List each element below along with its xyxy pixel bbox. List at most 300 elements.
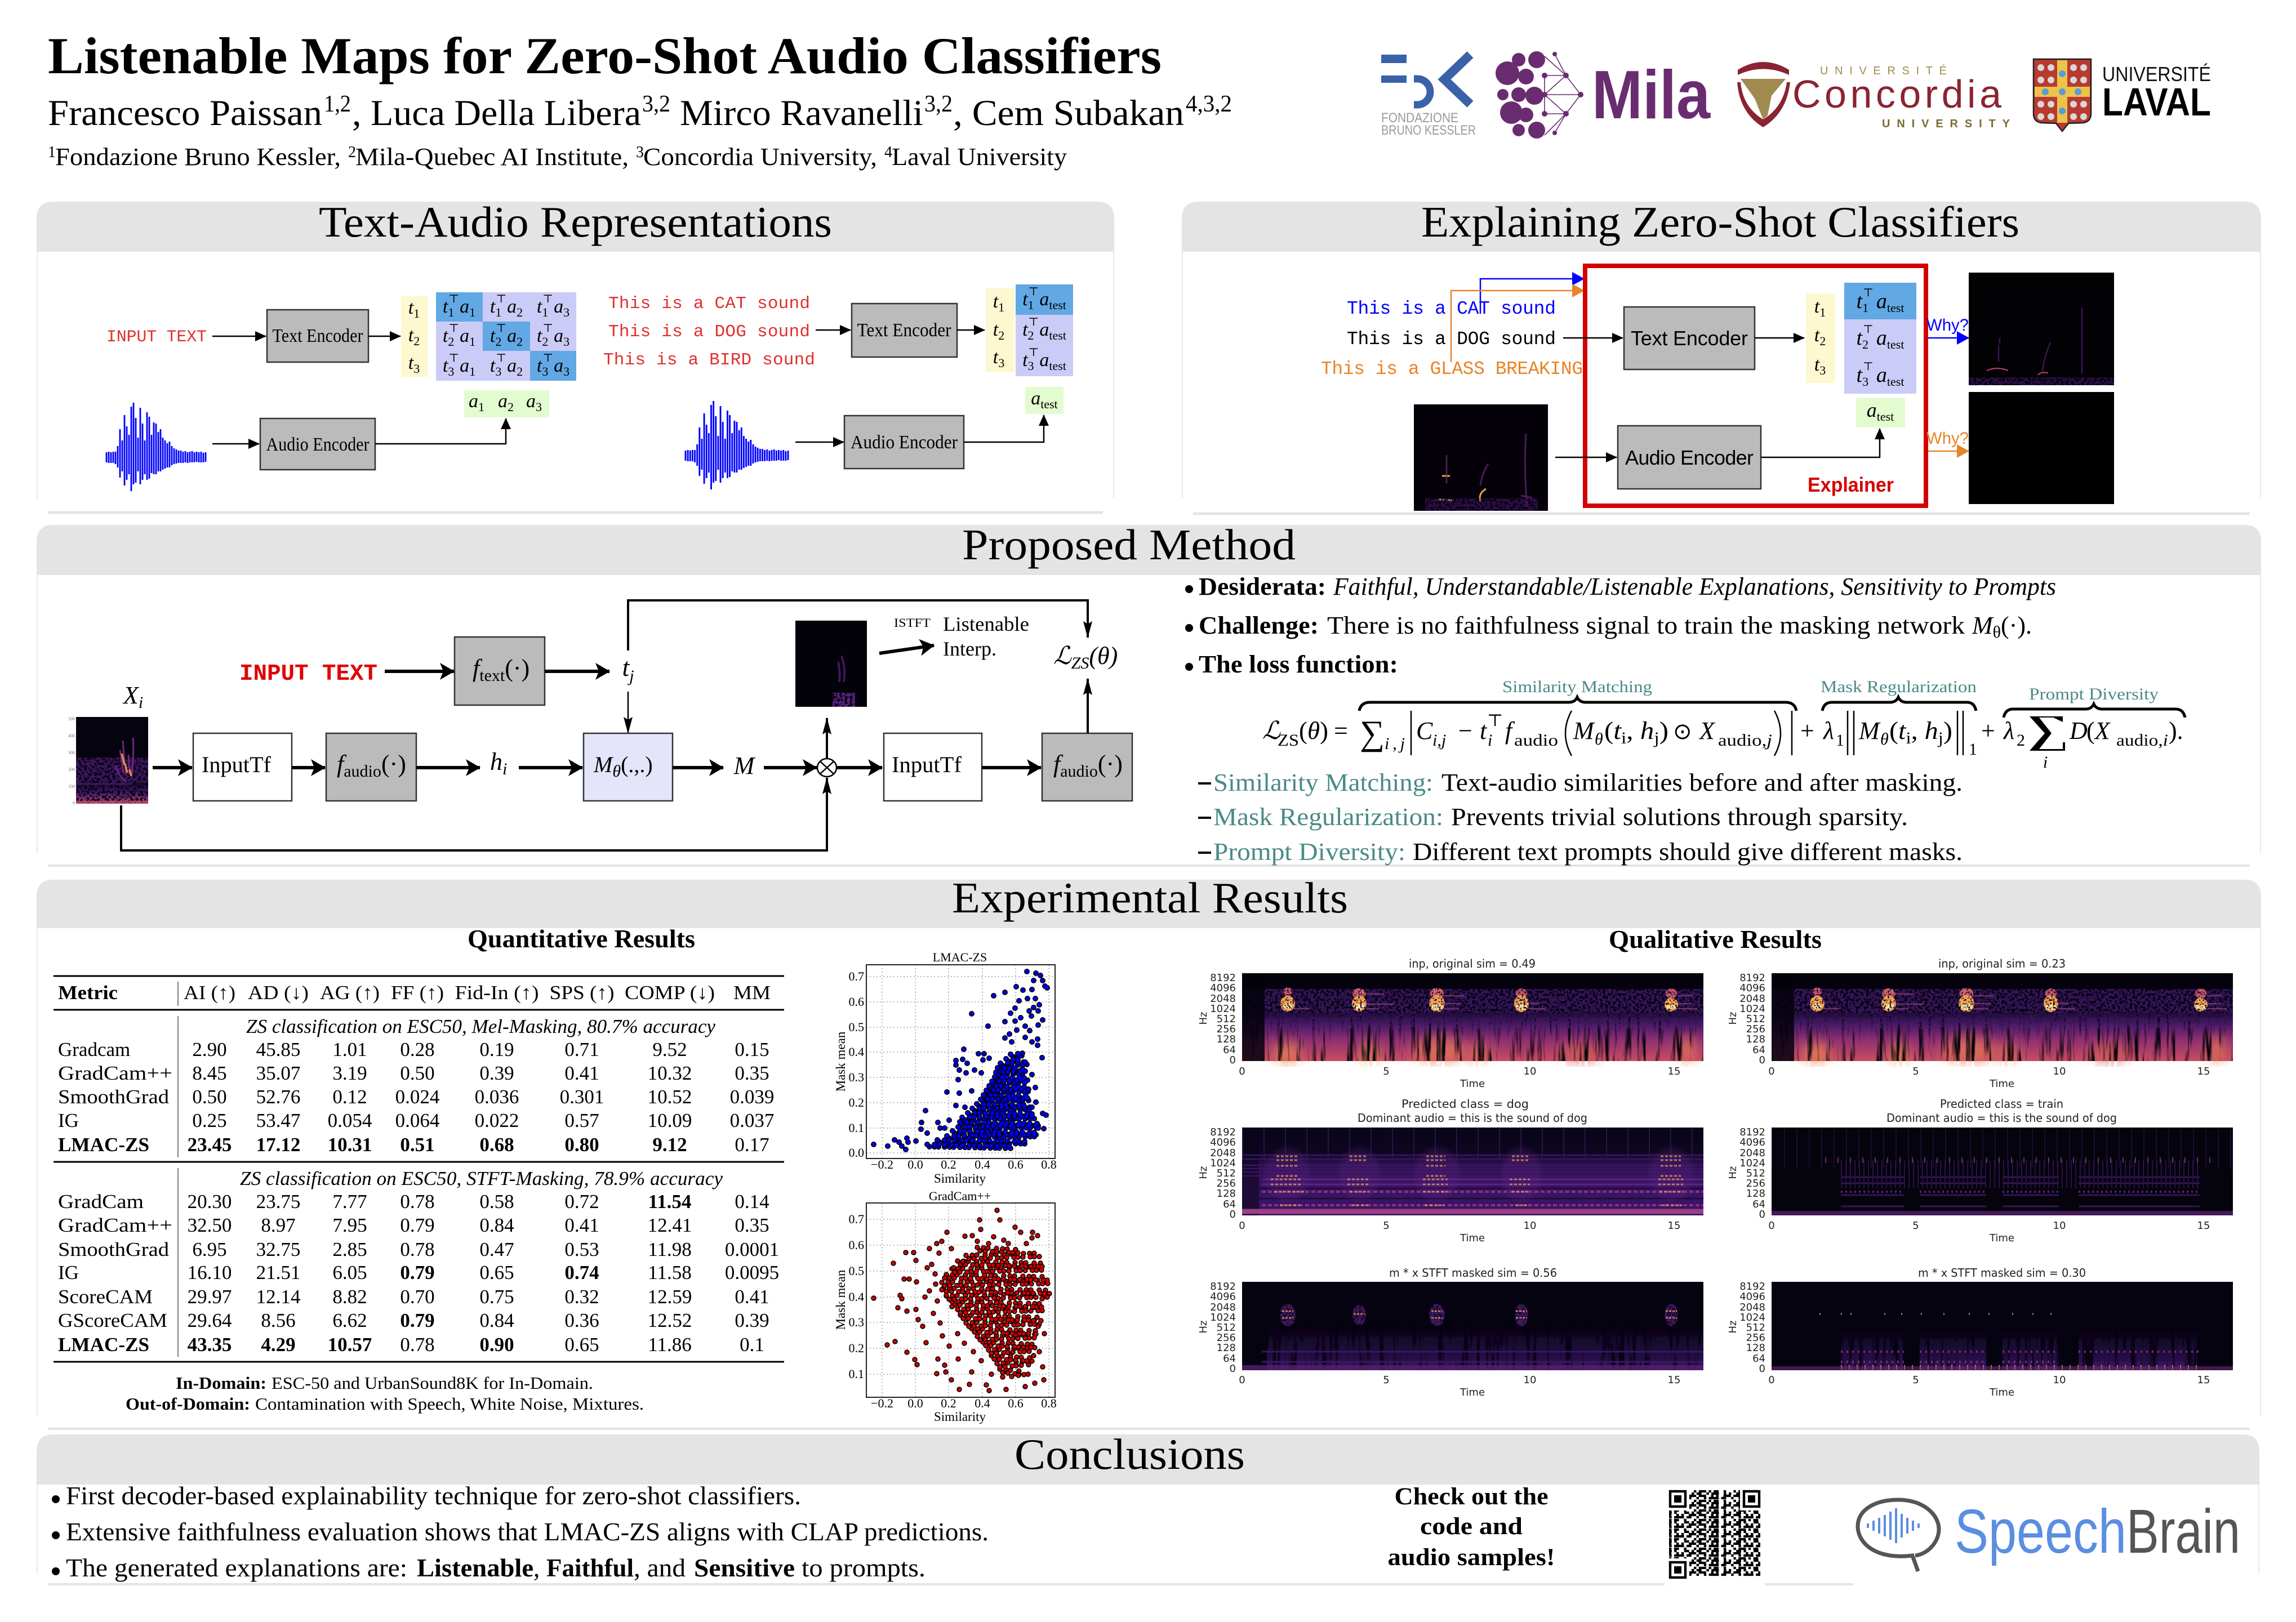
scatter plot: GradCam++: 0.7 bbox=[848, 1212, 864, 1226]
heading: Experimental Results bbox=[952, 874, 1348, 922]
conclusion bullets bbox=[52, 1482, 989, 1582]
panel: Explaining Zero-Shot Classifiers bbox=[1182, 198, 2261, 514]
left diagram: pairwise text-audio similarity: 3 bbox=[563, 364, 569, 378]
scatter plot: LMAC-ZS: −0.2 bbox=[871, 1157, 893, 1171]
table section: mel-masking: 0.51 bbox=[400, 1134, 435, 1156]
table section: mel-masking: 45.85 bbox=[256, 1039, 300, 1060]
left diagram: pairwise text-audio similarity: ⊤ bbox=[448, 293, 459, 305]
left diagram: pairwise text-audio similarity: a bbox=[460, 296, 469, 317]
spectrogram: masked sim 0.30: 2048 bbox=[1739, 1302, 1765, 1313]
table section: stft-masking: ScoreCAM bbox=[58, 1286, 153, 1308]
table section: stft-masking: LMAC-ZS bbox=[58, 1334, 149, 1356]
term explanations: Different text prompts should give different masks. bbox=[1413, 838, 1963, 866]
right diagram: zero-shot prompts: This is a BIRD sound bbox=[603, 350, 815, 370]
left diagram: pairwise text-audio similarity: 2 bbox=[508, 400, 514, 414]
table section: stft-masking: 0.14 bbox=[735, 1191, 769, 1213]
table section: stft-masking: 0.79 bbox=[400, 1309, 435, 1331]
loss function formula: D bbox=[2069, 717, 2088, 745]
encoders and similarities: test bbox=[1887, 375, 1904, 389]
method diagram: f bbox=[1053, 750, 1060, 778]
right diagram: zero-shot prompts: ⊤ bbox=[1029, 316, 1039, 328]
scatter plot: GradCam++: 0.6 bbox=[848, 1238, 864, 1252]
left diagram: pairwise text-audio similarity: 1 bbox=[448, 305, 454, 319]
loss function formula: Mask Regularization bbox=[1821, 678, 1977, 696]
method diagram: X bbox=[123, 681, 139, 709]
encoders and similarities: ⊤ bbox=[1863, 360, 1874, 373]
right diagram: zero-shot prompts: ⊤ bbox=[1029, 286, 1039, 298]
encoders and similarities: a bbox=[1876, 326, 1887, 350]
spectrogram: masked sim 0.56: 64 bbox=[1223, 1353, 1236, 1365]
table section: stft-masking: IG bbox=[58, 1262, 79, 1284]
loss function formula: = bbox=[1334, 717, 1348, 745]
heading: Proposed Method bbox=[962, 520, 1296, 569]
scatter plot: GradCam++: 0.0 bbox=[907, 1396, 923, 1410]
loss function formula: (t bbox=[1604, 717, 1621, 745]
left diagram: pairwise text-audio similarity: 2 bbox=[413, 334, 420, 348]
method diagram: i bbox=[502, 760, 507, 778]
spectrogram: predicted class train: 256 bbox=[1746, 1178, 1765, 1189]
right diagram: zero-shot prompts: test bbox=[1049, 298, 1066, 312]
table section: stft-masking: 0.78 bbox=[400, 1191, 435, 1213]
spectrogram: input, original sim 0.23: 8192 bbox=[1739, 972, 1765, 984]
right diagram: zero-shot prompts: t bbox=[1022, 350, 1028, 371]
left diagram: pairwise text-audio similarity: t bbox=[490, 296, 495, 317]
table section: mel-masking: 9.52 bbox=[652, 1039, 687, 1060]
spectrogram: predicted class dog: 128 bbox=[1217, 1188, 1236, 1200]
left diagram: pairwise text-audio similarity: t bbox=[443, 296, 448, 317]
table section: stft-masking: 21.51 bbox=[256, 1262, 300, 1284]
left diagram: pairwise text-audio similarity: 1 bbox=[413, 306, 420, 320]
left diagram: pairwise text-audio similarity: a bbox=[554, 326, 563, 346]
scatter plot: GradCam++: GradCam++ bbox=[929, 1189, 991, 1203]
affiliations bbox=[48, 143, 1067, 171]
scatter plot: LMAC-ZS bbox=[834, 950, 1057, 1186]
table section: stft-masking: 6.62 bbox=[332, 1309, 367, 1331]
authors: Mirco Ravanelli bbox=[680, 93, 923, 133]
table section: stft-masking: 32.50 bbox=[188, 1214, 232, 1236]
table section: stft-masking: GradCam++ bbox=[58, 1214, 172, 1236]
spectrogram: predicted class train: 15 bbox=[2197, 1220, 2210, 1232]
scatter plot: LMAC-ZS: 0.6 bbox=[1008, 1157, 1024, 1171]
table section: stft-masking: 0.47 bbox=[479, 1238, 514, 1260]
table section: stft-masking: 2.85 bbox=[332, 1238, 367, 1260]
QR code bbox=[1665, 1487, 1765, 1588]
table section: stft-masking: 0.84 bbox=[479, 1214, 514, 1236]
input mel spectrogram: 500 bbox=[68, 716, 75, 721]
encoders and similarities: ⊤ bbox=[1863, 287, 1874, 299]
table section: stft-masking: GradCam bbox=[58, 1191, 144, 1213]
masked spectrogram bbox=[795, 621, 867, 707]
spectrogram: masked sim 0.30: 1024 bbox=[1739, 1312, 1765, 1324]
explainer label: Explainer bbox=[1808, 473, 1894, 496]
conclusion bullets: First decoder-based explainability technique for zero-shot classifiers. bbox=[66, 1482, 801, 1510]
encoders and similarities: ⊤ bbox=[1863, 323, 1874, 336]
table section: mel-masking: 53.47 bbox=[256, 1109, 300, 1131]
logo: Mila bbox=[1496, 51, 1711, 139]
affiliations: Concordia University, bbox=[643, 143, 877, 171]
term explanations: Text-audio similarities before and after masking. bbox=[1441, 769, 1963, 796]
left diagram: pairwise text-audio similarity: Audio Encoder bbox=[266, 434, 370, 455]
loss function formula: i bbox=[2043, 753, 2048, 772]
left diagram: pairwise text-audio similarity: 2 bbox=[542, 335, 548, 349]
spectrogram: masked sim 0.30: 128 bbox=[1746, 1342, 1765, 1354]
spectrogram: input, original sim 0.23: 15 bbox=[2197, 1066, 2210, 1077]
table section: mel-masking bbox=[58, 1015, 774, 1156]
table section: stft-masking: 11.54 bbox=[648, 1191, 691, 1213]
panel: Text-Audio Representations bbox=[37, 198, 1114, 513]
table section: mel-masking: 0.054 bbox=[328, 1109, 372, 1131]
spectrogram: masked sim 0.30: Time bbox=[1989, 1387, 2014, 1398]
scatter plot: LMAC-ZS: 0.8 bbox=[1041, 1157, 1057, 1171]
left diagram: pairwise text-audio similarity: ⊤ bbox=[496, 293, 506, 305]
spectrogram: input, original sim 0.49: 2048 bbox=[1210, 993, 1236, 1005]
scatter plot: GradCam++: 0.3 bbox=[848, 1315, 864, 1329]
scatter plot: LMAC-ZS: 0.1 bbox=[848, 1121, 864, 1135]
left diagram: pairwise text-audio similarity: 1 bbox=[469, 335, 475, 349]
table section: stft-masking: ZS classification on ESC50, STFT-Masking, 78.9% accuracy bbox=[240, 1168, 723, 1189]
table section: stft-masking: 0.78 bbox=[400, 1334, 435, 1356]
spectrogram: predicted class dog: Hz bbox=[1198, 1166, 1209, 1179]
left diagram: pairwise text-audio similarity: 2 bbox=[517, 335, 523, 349]
loss function formula: ⊤ bbox=[1487, 711, 1503, 730]
scatter plot: GradCam++: 0.2 bbox=[941, 1396, 956, 1410]
affiliations: Laval University bbox=[892, 143, 1067, 171]
spectrogram: masked sim 0.30: 256 bbox=[1746, 1332, 1765, 1344]
left diagram: pairwise text-audio similarity: a bbox=[554, 355, 563, 376]
right diagram: zero-shot prompts: 3 bbox=[998, 356, 1004, 370]
method diagram: Interp. bbox=[943, 638, 996, 660]
table section: stft-masking: 29.97 bbox=[188, 1286, 232, 1308]
table section: mel-masking: 17.12 bbox=[256, 1134, 300, 1156]
left diagram: pairwise text-audio similarity: ⊤ bbox=[542, 352, 553, 364]
spectrogram: input, original sim 0.23: 0 bbox=[1768, 1066, 1775, 1077]
left diagram: pairwise text-audio similarity: Text Encoder bbox=[273, 326, 363, 346]
encoders and similarities: 1 bbox=[1862, 301, 1868, 315]
left diagram: pairwise text-audio similarity: t bbox=[408, 325, 413, 346]
spectrogram: masked sim 0.30: 8192 bbox=[1739, 1281, 1765, 1293]
spectrogram: predicted class train: 5 bbox=[1912, 1220, 1919, 1232]
table section: mel-masking: SmoothGrad bbox=[58, 1086, 170, 1108]
prompts: This is a GLASS BREAKING bbox=[1321, 359, 1583, 380]
table section: mel-masking: 0.41 bbox=[564, 1062, 599, 1084]
table section: stft-masking: 0.79 bbox=[400, 1262, 435, 1284]
right diagram: zero-shot prompts: a bbox=[1039, 289, 1049, 310]
table section: stft-masking: 0.36 bbox=[564, 1309, 599, 1331]
spectrogram: masked sim 0.30: 4096 bbox=[1739, 1291, 1765, 1303]
results table: AG (↑) bbox=[320, 982, 380, 1004]
scatter plot: LMAC-ZS: 0.6 bbox=[848, 995, 864, 1009]
spectrogram: input, original sim 0.49: inp, original sim = 0.49 bbox=[1409, 957, 1536, 970]
call to action bbox=[1388, 1483, 1555, 1571]
spectrogram: predicted class train: 0 bbox=[1759, 1209, 1765, 1220]
authors: , Luca Della Libera bbox=[352, 93, 641, 133]
right diagram: zero-shot prompts: t bbox=[1022, 289, 1028, 310]
spectrogram: input, original sim 0.23: 512 bbox=[1746, 1013, 1765, 1025]
table section: stft-masking: 0.70 bbox=[400, 1286, 435, 1308]
results table: COMP (↓) bbox=[625, 982, 715, 1004]
left diagram: pairwise text-audio similarity: 2 bbox=[495, 335, 501, 349]
spectrogram: input, original sim 0.23: 1024 bbox=[1739, 1003, 1765, 1015]
loss function formula: + bbox=[1800, 717, 1814, 745]
table section: stft-masking: 0.74 bbox=[564, 1262, 599, 1284]
table section: stft-masking: 11.98 bbox=[648, 1238, 692, 1260]
loss function formula: − bbox=[1458, 717, 1472, 745]
left diagram: pairwise text-audio similarity: a bbox=[460, 355, 469, 376]
results table bbox=[54, 976, 784, 1362]
spectrogram: predicted class train: Hz bbox=[1727, 1166, 1739, 1179]
scatter plot: LMAC-ZS: 0.7 bbox=[848, 969, 864, 983]
loss function formula: M bbox=[1573, 717, 1595, 745]
table section: stft-masking: GScoreCAM bbox=[58, 1309, 167, 1331]
loss function formula: 1 bbox=[1969, 740, 1977, 759]
prompts bbox=[1321, 279, 1584, 380]
method diagram: i bbox=[139, 693, 143, 712]
spectrogram: masked sim 0.56: 1024 bbox=[1210, 1312, 1236, 1324]
method diagram: (.,.) bbox=[621, 752, 653, 777]
right diagram: zero-shot prompts: Text Encoder bbox=[857, 320, 951, 341]
scatter plot: LMAC-ZS: Mask mean bbox=[834, 1031, 848, 1091]
left diagram: pairwise text-audio similarity: a bbox=[507, 355, 517, 376]
left diagram: pairwise text-audio similarity bbox=[106, 292, 576, 491]
right diagram: zero-shot prompts: Audio Encoder bbox=[851, 432, 958, 453]
spectrogram: masked sim 0.30: 15 bbox=[2197, 1374, 2210, 1386]
spectrogram: masked sim 0.56: 15 bbox=[1668, 1374, 1680, 1386]
left diagram: pairwise text-audio similarity: ⊤ bbox=[542, 293, 553, 305]
logo: SpeechBrain bbox=[1853, 1487, 2248, 1586]
right diagram: zero-shot prompts: This is a DOG sound bbox=[608, 322, 810, 342]
encoders and similarities: 3 bbox=[1819, 363, 1826, 377]
loss function formula: i,j bbox=[1432, 731, 1446, 750]
call to action: code and bbox=[1420, 1513, 1523, 1540]
call to action: Check out the bbox=[1395, 1483, 1548, 1510]
spectrogram: masked sim 0.56: 10 bbox=[1524, 1374, 1536, 1386]
explanations: Why? bbox=[1926, 429, 1969, 448]
method diagram: InputTf bbox=[202, 752, 272, 777]
sub-heading: qualitative: Qualitative Results bbox=[1609, 925, 1822, 953]
loss function formula: (t bbox=[1889, 717, 1905, 745]
table section: mel-masking: 0.17 bbox=[735, 1134, 769, 1156]
table section: mel-masking: 9.12 bbox=[652, 1134, 687, 1156]
affiliations: Fondazione Bruno Kessler, bbox=[55, 143, 341, 171]
table section: stft-masking: 0.53 bbox=[564, 1238, 599, 1260]
spectrogram: predicted class train: 1024 bbox=[1739, 1157, 1765, 1169]
table section: stft-masking: 6.05 bbox=[332, 1262, 367, 1284]
table section: stft-masking: 0.41 bbox=[735, 1286, 769, 1308]
right diagram: zero-shot prompts: t bbox=[993, 291, 998, 312]
logo: FBK: BRUNO KESSLER bbox=[1381, 123, 1476, 138]
logo: Concordia bbox=[1737, 62, 2010, 130]
spectrogram: predicted class train: 64 bbox=[1752, 1198, 1765, 1210]
right diagram: zero-shot prompts: 3 bbox=[1028, 359, 1034, 373]
spectrogram: predicted class train: Dominant audio = this is the sound of dog bbox=[1886, 1111, 2117, 1125]
loss function formula: 1 bbox=[1836, 731, 1844, 750]
scatter plot: LMAC-ZS: 0.0 bbox=[907, 1157, 923, 1171]
scatter plot: GradCam++: 0.8 bbox=[1041, 1396, 1057, 1410]
table section: mel-masking: 35.07 bbox=[256, 1062, 300, 1084]
scatter plot: GradCam++: Mask mean bbox=[834, 1269, 848, 1330]
loss function formula: 2 bbox=[2017, 731, 2025, 750]
spectrogram: predicted class train: 0 bbox=[1768, 1220, 1775, 1232]
table section: stft-masking: 11.86 bbox=[648, 1334, 692, 1356]
method diagram: (·) bbox=[505, 654, 529, 682]
spectrogram: predicted class dog: 0 bbox=[1230, 1209, 1236, 1220]
spectrogram: masked sim 0.30: m * x STFT masked sim = 0.30 bbox=[1918, 1266, 2086, 1280]
term explanations: Similarity Matching: bbox=[1213, 769, 1433, 796]
loss function formula: audio bbox=[1514, 731, 1558, 750]
desiderata and challenge bullets: (·). bbox=[2001, 612, 2032, 639]
left diagram: pairwise text-audio similarity: a bbox=[507, 326, 517, 346]
right diagram: zero-shot prompts: ⊤ bbox=[1029, 346, 1039, 359]
panel: Proposed Method bbox=[37, 520, 2261, 866]
table section: mel-masking: 0.39 bbox=[479, 1062, 514, 1084]
method diagram: f bbox=[337, 750, 344, 778]
method diagram bbox=[68, 600, 1132, 850]
table section: stft-masking: 6.95 bbox=[192, 1238, 227, 1260]
spectrogram: masked sim 0.56: Time bbox=[1460, 1387, 1485, 1398]
table section: stft-masking: 0.41 bbox=[564, 1214, 599, 1236]
table section: mel-masking: 52.76 bbox=[256, 1086, 300, 1108]
table section: mel-masking: 10.32 bbox=[648, 1062, 692, 1084]
spectrogram: predicted class train: 10 bbox=[2053, 1220, 2066, 1232]
table section: mel-masking: GradCam++ bbox=[58, 1062, 172, 1084]
table section: stft-masking: 10.57 bbox=[328, 1334, 372, 1356]
left diagram: pairwise text-audio similarity: ⊤ bbox=[542, 322, 553, 335]
table section: mel-masking: 10.31 bbox=[328, 1134, 372, 1156]
left diagram: pairwise text-audio similarity: 1 bbox=[469, 364, 475, 378]
method diagram: M bbox=[594, 752, 612, 777]
desiderata and challenge bullets: The loss function: bbox=[1199, 650, 1398, 678]
encoders and similarities: a bbox=[1867, 399, 1877, 421]
loss function formula: ) bbox=[1659, 717, 1668, 745]
table section: mel-masking: 0.35 bbox=[735, 1062, 769, 1084]
conclusion bullets: The generated explanations are: bbox=[66, 1554, 407, 1582]
spectrogram: predicted class dog: 8192 bbox=[1210, 1126, 1236, 1138]
table section: stft-masking: 12.52 bbox=[648, 1309, 692, 1331]
table section: stft-masking: 7.95 bbox=[332, 1214, 367, 1236]
table footnote: ESC-50 and UrbanSound8K for In-Domain. bbox=[272, 1373, 593, 1393]
panel: Experimental Results bbox=[37, 874, 2261, 1429]
left diagram: pairwise text-audio similarity: t bbox=[443, 355, 448, 376]
explanations: Why? bbox=[1926, 316, 1969, 335]
spectrogram: input, original sim 0.49: 0 bbox=[1239, 1066, 1245, 1077]
loss function formula: θ bbox=[1880, 730, 1889, 748]
results table: SPS (↑) bbox=[550, 982, 614, 1004]
loss function formula: (θ) bbox=[1299, 717, 1328, 745]
table section: mel-masking: 0.57 bbox=[564, 1109, 599, 1131]
loss function formula: f bbox=[1505, 717, 1515, 745]
right diagram: zero-shot prompts bbox=[603, 284, 1073, 489]
table section: stft-masking: 0.58 bbox=[479, 1191, 514, 1213]
logo: Mila: Mila bbox=[1592, 56, 1711, 133]
left diagram: pairwise text-audio similarity: ⊤ bbox=[496, 352, 506, 364]
table section: stft-masking: 7.77 bbox=[332, 1191, 367, 1213]
conclusion bullets: Extensive faithfulness evaluation shows that LMAC-ZS aligns with CLAP predictions. bbox=[66, 1518, 989, 1546]
encoders and similarities: t bbox=[1857, 363, 1862, 387]
table section: mel-masking: IG bbox=[58, 1109, 79, 1131]
loss function formula: C bbox=[1416, 717, 1433, 745]
scatter plot: LMAC-ZS: 0.4 bbox=[975, 1157, 990, 1171]
authors: 3,2 bbox=[924, 91, 953, 117]
input mel spectrogram: 200 bbox=[68, 767, 75, 772]
loss function formula: Similarity Matching bbox=[1502, 678, 1652, 696]
right diagram: zero-shot prompts: test bbox=[1049, 328, 1066, 342]
encoders and similarities: t bbox=[1814, 354, 1819, 375]
left diagram: pairwise text-audio similarity: t bbox=[490, 355, 495, 376]
loss function formula: M bbox=[1858, 717, 1881, 745]
spectrogram: masked sim 0.56: 2048 bbox=[1210, 1302, 1236, 1313]
loss function formula: ⊙ bbox=[1673, 719, 1692, 745]
encoders and similarities: a bbox=[1876, 363, 1887, 387]
spectrogram: predicted class train: 2048 bbox=[1739, 1147, 1765, 1159]
method diagram: Listenable bbox=[943, 613, 1029, 635]
affiliations: 4 bbox=[884, 144, 892, 161]
spectrogram: input, original sim 0.23: 4096 bbox=[1739, 982, 1765, 994]
call to action: audio samples! bbox=[1388, 1544, 1555, 1571]
desiderata and challenge bullets: There is no faithfulness signal to train the masking network bbox=[1327, 612, 1965, 639]
spectrogram: predicted class dog: 64 bbox=[1223, 1198, 1236, 1210]
table section: mel-masking: 10.09 bbox=[648, 1109, 692, 1131]
left diagram: pairwise text-audio similarity: 2 bbox=[517, 305, 523, 319]
spectrogram: input, original sim 0.49: 5 bbox=[1383, 1066, 1390, 1077]
loss function formula: λ bbox=[2003, 717, 2014, 745]
spectrogram: predicted class train bbox=[1727, 1097, 2233, 1244]
spectrogram: input, original sim 0.23: Hz bbox=[1727, 1012, 1739, 1024]
input mel spectrogram: 300 bbox=[68, 750, 75, 755]
table section: stft-masking: 0.90 bbox=[479, 1334, 514, 1356]
loss function formula: audio, j bbox=[1718, 731, 1772, 750]
conclusion bullets: , and bbox=[634, 1554, 686, 1582]
left diagram: pairwise text-audio similarity: 3 bbox=[413, 362, 420, 376]
table section: mel-masking: 0.80 bbox=[564, 1134, 599, 1156]
loss function formula: X bbox=[1698, 717, 1716, 745]
table footnote bbox=[126, 1373, 644, 1414]
input spectrogram bbox=[1414, 404, 1548, 511]
affiliations: Mila-Quebec AI Institute, bbox=[355, 143, 629, 171]
table section: stft-masking: 0.72 bbox=[564, 1191, 599, 1213]
loss function formula: j bbox=[1653, 729, 1659, 747]
scatter plot: LMAC-ZS: 0.4 bbox=[848, 1045, 864, 1059]
table section: mel-masking: 23.45 bbox=[188, 1134, 232, 1156]
left diagram: pairwise text-audio similarity: ⊤ bbox=[496, 322, 506, 335]
method diagram: (·) bbox=[1098, 750, 1123, 778]
method diagram: text bbox=[479, 666, 505, 685]
prompts: This is a DOG sound bbox=[1347, 329, 1556, 350]
table section: mel-masking: 0.15 bbox=[735, 1039, 769, 1060]
spectrogram: input, original sim 0.49 bbox=[1198, 957, 1703, 1090]
loss function formula: ) bbox=[1943, 717, 1952, 745]
spectrogram: predicted class train: 512 bbox=[1746, 1168, 1765, 1179]
input mel spectrogram: 100 bbox=[68, 784, 75, 789]
input mel spectrogram: 0 bbox=[73, 800, 75, 805]
encoders and similarities: t bbox=[1814, 325, 1819, 346]
right diagram: zero-shot prompts: test bbox=[1049, 359, 1066, 373]
table section: stft-masking: 11.58 bbox=[648, 1262, 692, 1284]
left diagram: pairwise text-audio similarity: t bbox=[537, 355, 542, 376]
logo: Concordia: UNIVERSITY bbox=[1882, 118, 2010, 130]
encoders and similarities: t bbox=[1857, 289, 1862, 313]
scatter plot: GradCam++: 0.5 bbox=[848, 1264, 864, 1278]
spectrogram: input, original sim 0.49: 128 bbox=[1217, 1033, 1236, 1045]
results table: Fid-In (↑) bbox=[455, 982, 539, 1004]
spectrogram: input, original sim 0.23: 64 bbox=[1752, 1044, 1765, 1056]
spectrogram: masked sim 0.56: 128 bbox=[1217, 1342, 1236, 1354]
spectrogram: input, original sim 0.23: 5 bbox=[1912, 1066, 1919, 1077]
table section: stft-masking: 43.35 bbox=[188, 1334, 232, 1356]
encoders and similarities: t bbox=[1857, 326, 1862, 350]
loss function formula: i bbox=[1621, 729, 1626, 747]
spectrogram: predicted class dog: 5 bbox=[1383, 1220, 1390, 1232]
left diagram: pairwise text-audio similarity: t bbox=[490, 326, 495, 346]
